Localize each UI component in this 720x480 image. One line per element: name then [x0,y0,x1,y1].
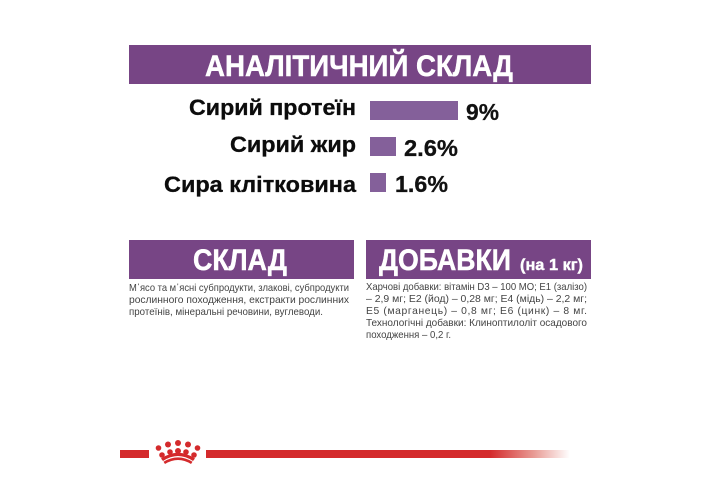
heading banner: additives per 1 kg [366,240,591,279]
bar row: crude protein 9%: Сирий протеїн [189,95,356,120]
panel: analytical composition [129,45,591,197]
text block: composition ingredients: протеїнів, мінеральні речовини, вуглеводи. [129,307,323,318]
bar row: crude fat 2.6%: 2.6% [404,135,458,161]
bar row: crude fibre 1.6%: Сира клітковина [164,172,356,197]
text block: additives list: походження – 0,2 г. [366,330,451,341]
text block: composition ingredients: М᾿ясо та м᾿ясні субпродукти, злакові, субпродукти [129,282,349,294]
panel: composition [129,240,354,318]
text block: additives list: Харчові добавки: вітамін D3 – 100 МО; Е1 (залізо) [366,281,587,293]
heading banner: additives per 1 kg: ДОБАВКИ [379,244,511,277]
heading banner: additives per 1 kg: (на 1 кг) [520,257,583,274]
heading banner: analytical composition [129,45,591,84]
text block: composition ingredients [129,282,350,318]
red line right fading out [206,450,570,458]
heading banner: composition: СКЛАД [193,244,287,277]
heading banner: analytical composition: АНАЛІТИЧНИЙ СКЛАД [205,49,513,83]
bar row: crude fibre 1.6% [164,171,448,197]
bar row: crude fat 2.6% [230,132,458,161]
bar row: crude fibre 1.6%: 1.6% [395,171,448,197]
icon: crown logo [156,440,200,464]
text block: additives list: Технологічні добавки: Клиноптилоліт осадового [366,317,587,329]
text block: additives list: – 2,9 мг; Е2 (йод) – 0,28 мг; Е4 (мідь) – 2,2 мг; [366,294,587,305]
text block: additives list: Е5 (марганець) – 0,8 мг; Е6 (цинк) – 8 мг. [366,306,587,317]
text block: additives list [366,281,587,341]
panel: additives [366,240,591,341]
bar row: crude protein 9%: 9% [466,99,499,125]
red line left [120,450,149,458]
footer brand line [120,440,570,464]
bar row: crude fat 2.6%: Сирий жир [230,132,356,157]
bar row: crude protein 9% [189,95,499,125]
heading banner: composition [129,240,354,279]
text block: composition ingredients: рослинного походження, екстракти рослинних [129,295,350,306]
